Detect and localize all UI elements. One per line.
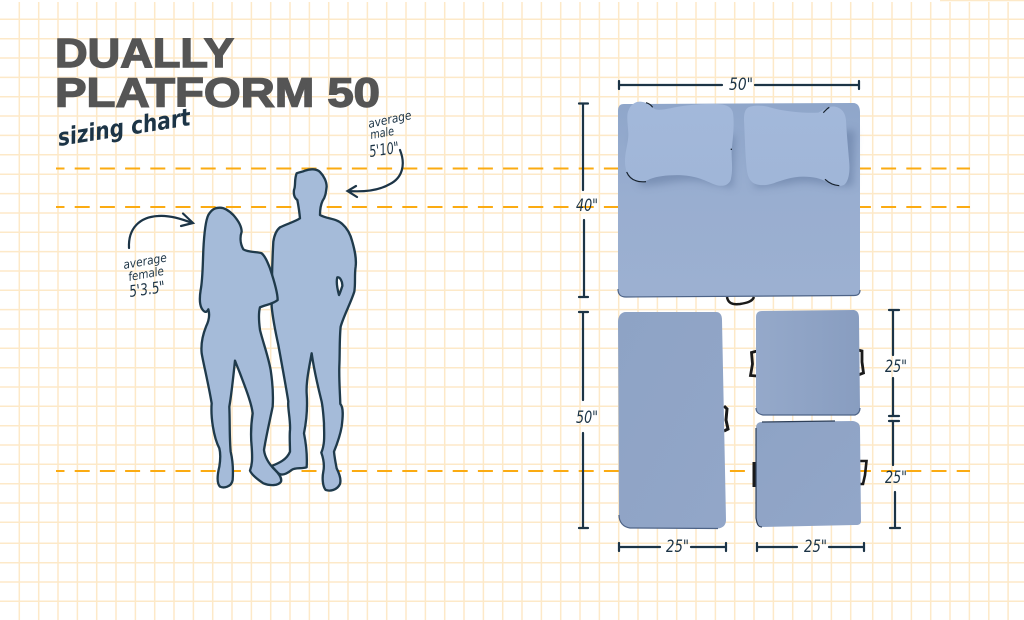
label: average female: 5'3.5" [128, 277, 166, 301]
mattress surface [618, 103, 860, 297]
title: DUALLY [55, 30, 234, 76]
label: average female: female [127, 264, 165, 284]
female annotation [122, 214, 193, 301]
arrow: to female [129, 214, 193, 248]
panel surface [618, 312, 726, 528]
dimension: bottom width 25 right [757, 537, 864, 557]
dimension: height 25 upper: 25" [885, 357, 907, 377]
dimension: bottom width 25 left [619, 537, 726, 557]
dimension: height 25 lower: 25" [885, 468, 907, 488]
mattress: unfolded with pillows [618, 102, 860, 304]
dimension: top width 50 [619, 75, 859, 95]
dimension: bottom width 25 right: 25" [804, 537, 827, 557]
label: average female: average [122, 251, 168, 272]
pillow: right [744, 106, 849, 186]
dimension: height 50 [576, 312, 598, 528]
male annotation [348, 108, 413, 197]
panel edge [619, 515, 718, 528]
label: average female [122, 251, 168, 301]
title [55, 30, 380, 116]
handle [727, 297, 754, 304]
label: average male [367, 108, 413, 161]
pillow: left [625, 102, 734, 186]
panel surface [756, 421, 861, 527]
handle [724, 406, 728, 431]
dimension: height 40: 40" [576, 196, 598, 216]
pillows [625, 102, 849, 186]
panel edge [756, 421, 835, 527]
mattress: upper square panel [750, 310, 864, 415]
subtitle: sizing chart [56, 103, 194, 152]
dimension: bottom width 25 left: 25" [666, 537, 689, 557]
handles [750, 350, 864, 376]
arrow: to male [348, 150, 403, 197]
label: average male: male [369, 124, 395, 142]
silhouettes [200, 169, 356, 491]
label: average male: average [367, 108, 413, 131]
dimension: height 40 [576, 104, 598, 297]
silhouette: average male [272, 169, 356, 491]
orange height reference lines [56, 168, 970, 471]
panel edge [756, 408, 860, 415]
mattress: lower square panel [754, 421, 866, 527]
dimension: height 25 lower [885, 421, 907, 528]
pillow piping [627, 103, 839, 186]
silhouette: average female [200, 208, 281, 487]
title: PLATFORM 50 [55, 70, 380, 116]
dimension: height 25 upper [885, 310, 907, 416]
label: average male: 5'10" [368, 138, 400, 161]
mattress: long panel [618, 312, 728, 528]
dimension: top width 50: 50" [729, 75, 753, 95]
mattress edge [618, 289, 860, 297]
dimension: height 50: 50" [576, 408, 598, 428]
pillow shadows [632, 130, 855, 188]
panel surface [756, 310, 860, 415]
handles [752, 462, 756, 487]
